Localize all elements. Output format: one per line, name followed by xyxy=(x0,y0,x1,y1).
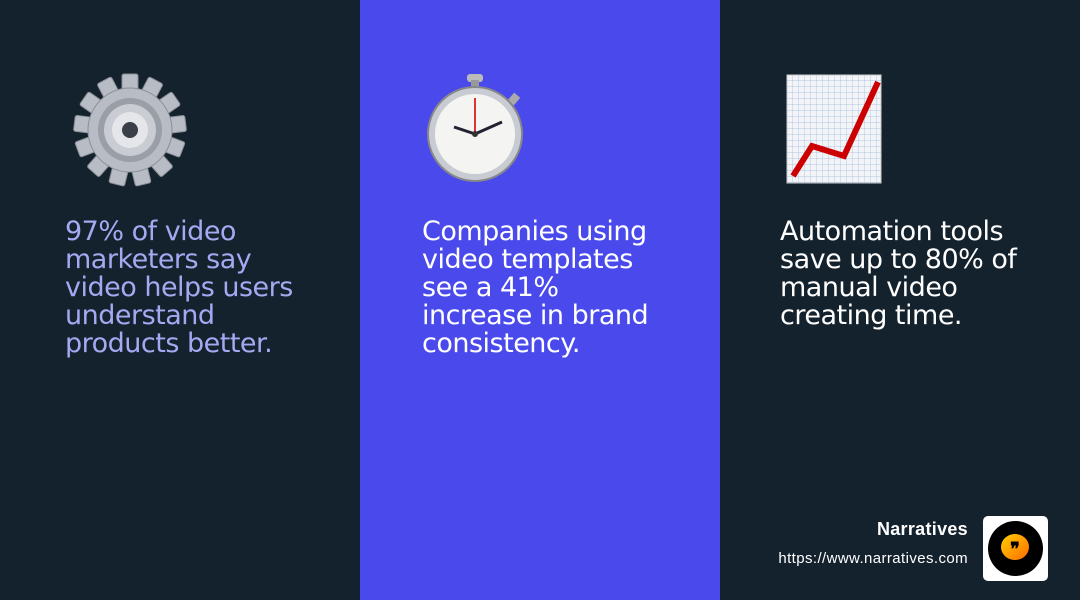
text: stat 41%: Companies using video templates see a 41% increase in brand consistency. xyxy=(422,216,648,359)
panel: automation xyxy=(720,0,1080,600)
brand name: Narratives xyxy=(877,519,968,539)
logo: ❞ xyxy=(1010,539,1020,559)
text: stat 80%: Automation tools save up to 80% of manual video creating time. xyxy=(780,216,1016,331)
logo xyxy=(983,516,1048,581)
icon: stopwatch xyxy=(427,74,523,182)
icon: gear xyxy=(73,74,187,186)
text: stat 97%: 97% of video marketers say video helps users understand products better. xyxy=(65,216,293,359)
brand footer xyxy=(778,516,1048,581)
panel: templates xyxy=(360,0,720,600)
icon: chart xyxy=(786,74,882,184)
panel: video understanding xyxy=(0,0,360,600)
brand url: https://www.narratives.com xyxy=(778,550,968,567)
